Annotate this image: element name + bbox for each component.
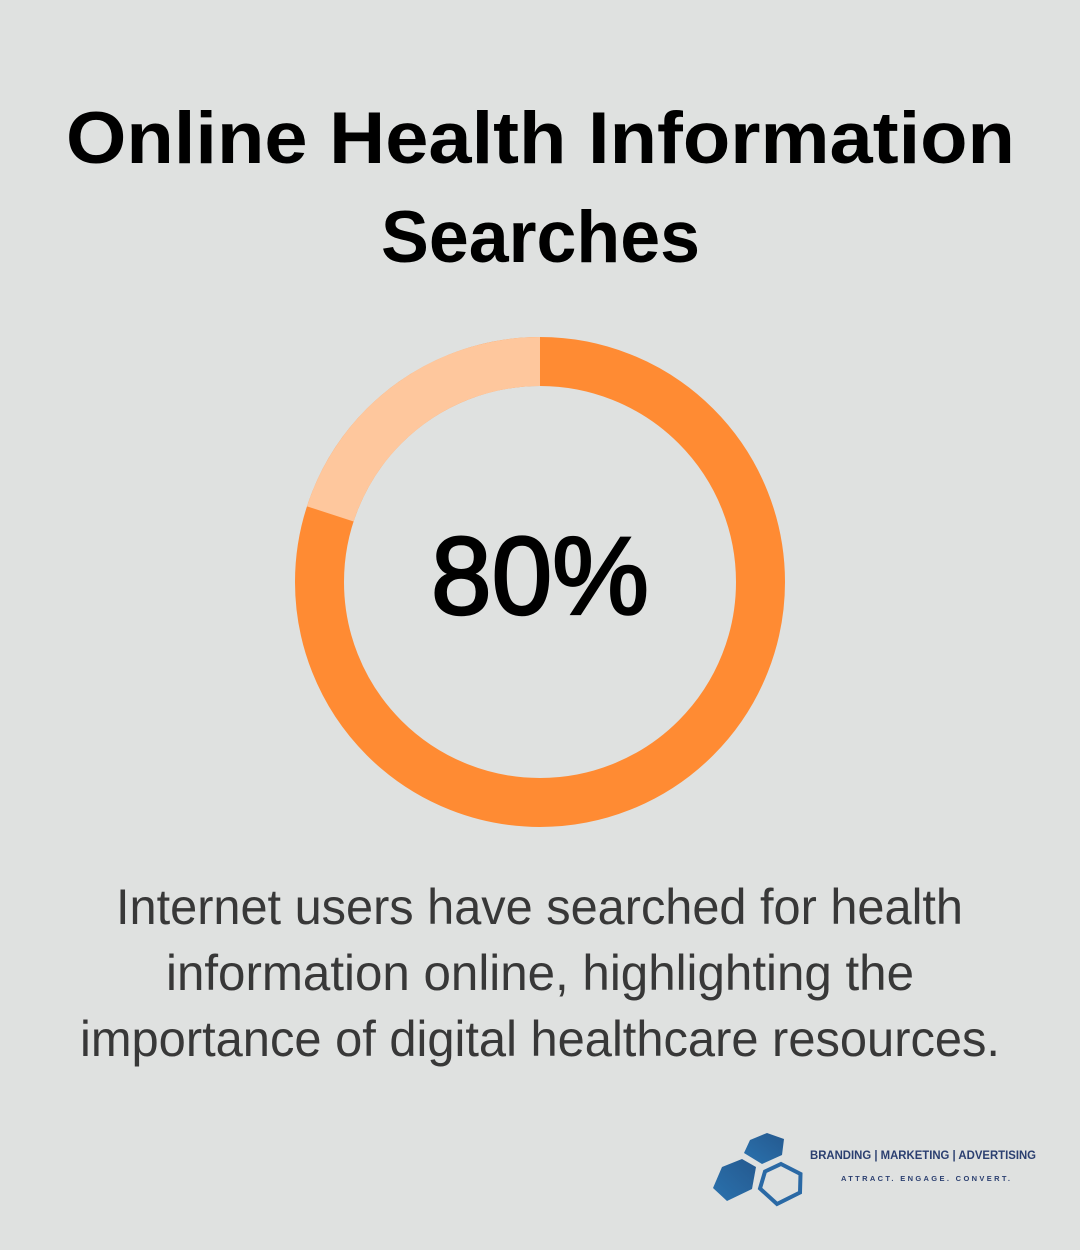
donut value: 80% — [431, 515, 649, 638]
description text: information online, highlighting the — [166, 945, 914, 1001]
description text: importance of digital healthcare resources. — [80, 1011, 1000, 1067]
title — [66, 98, 1015, 278]
icon: hexagon logo mark — [713, 1133, 800, 1204]
title: Online Health Information — [66, 98, 1015, 179]
logo tagline — [810, 1150, 1036, 1183]
logo tagline: BRANDING | MARKETING | ADVERTISING — [810, 1150, 1036, 1162]
description text — [80, 879, 1000, 1067]
donut chart: 80% — [320, 362, 760, 802]
logo — [713, 1133, 1036, 1204]
description text: Internet users have searched for health — [116, 879, 963, 935]
title: Searches — [381, 197, 700, 278]
logo tagline: ATTRACT. ENGAGE. CONVERT. — [841, 1174, 1010, 1183]
